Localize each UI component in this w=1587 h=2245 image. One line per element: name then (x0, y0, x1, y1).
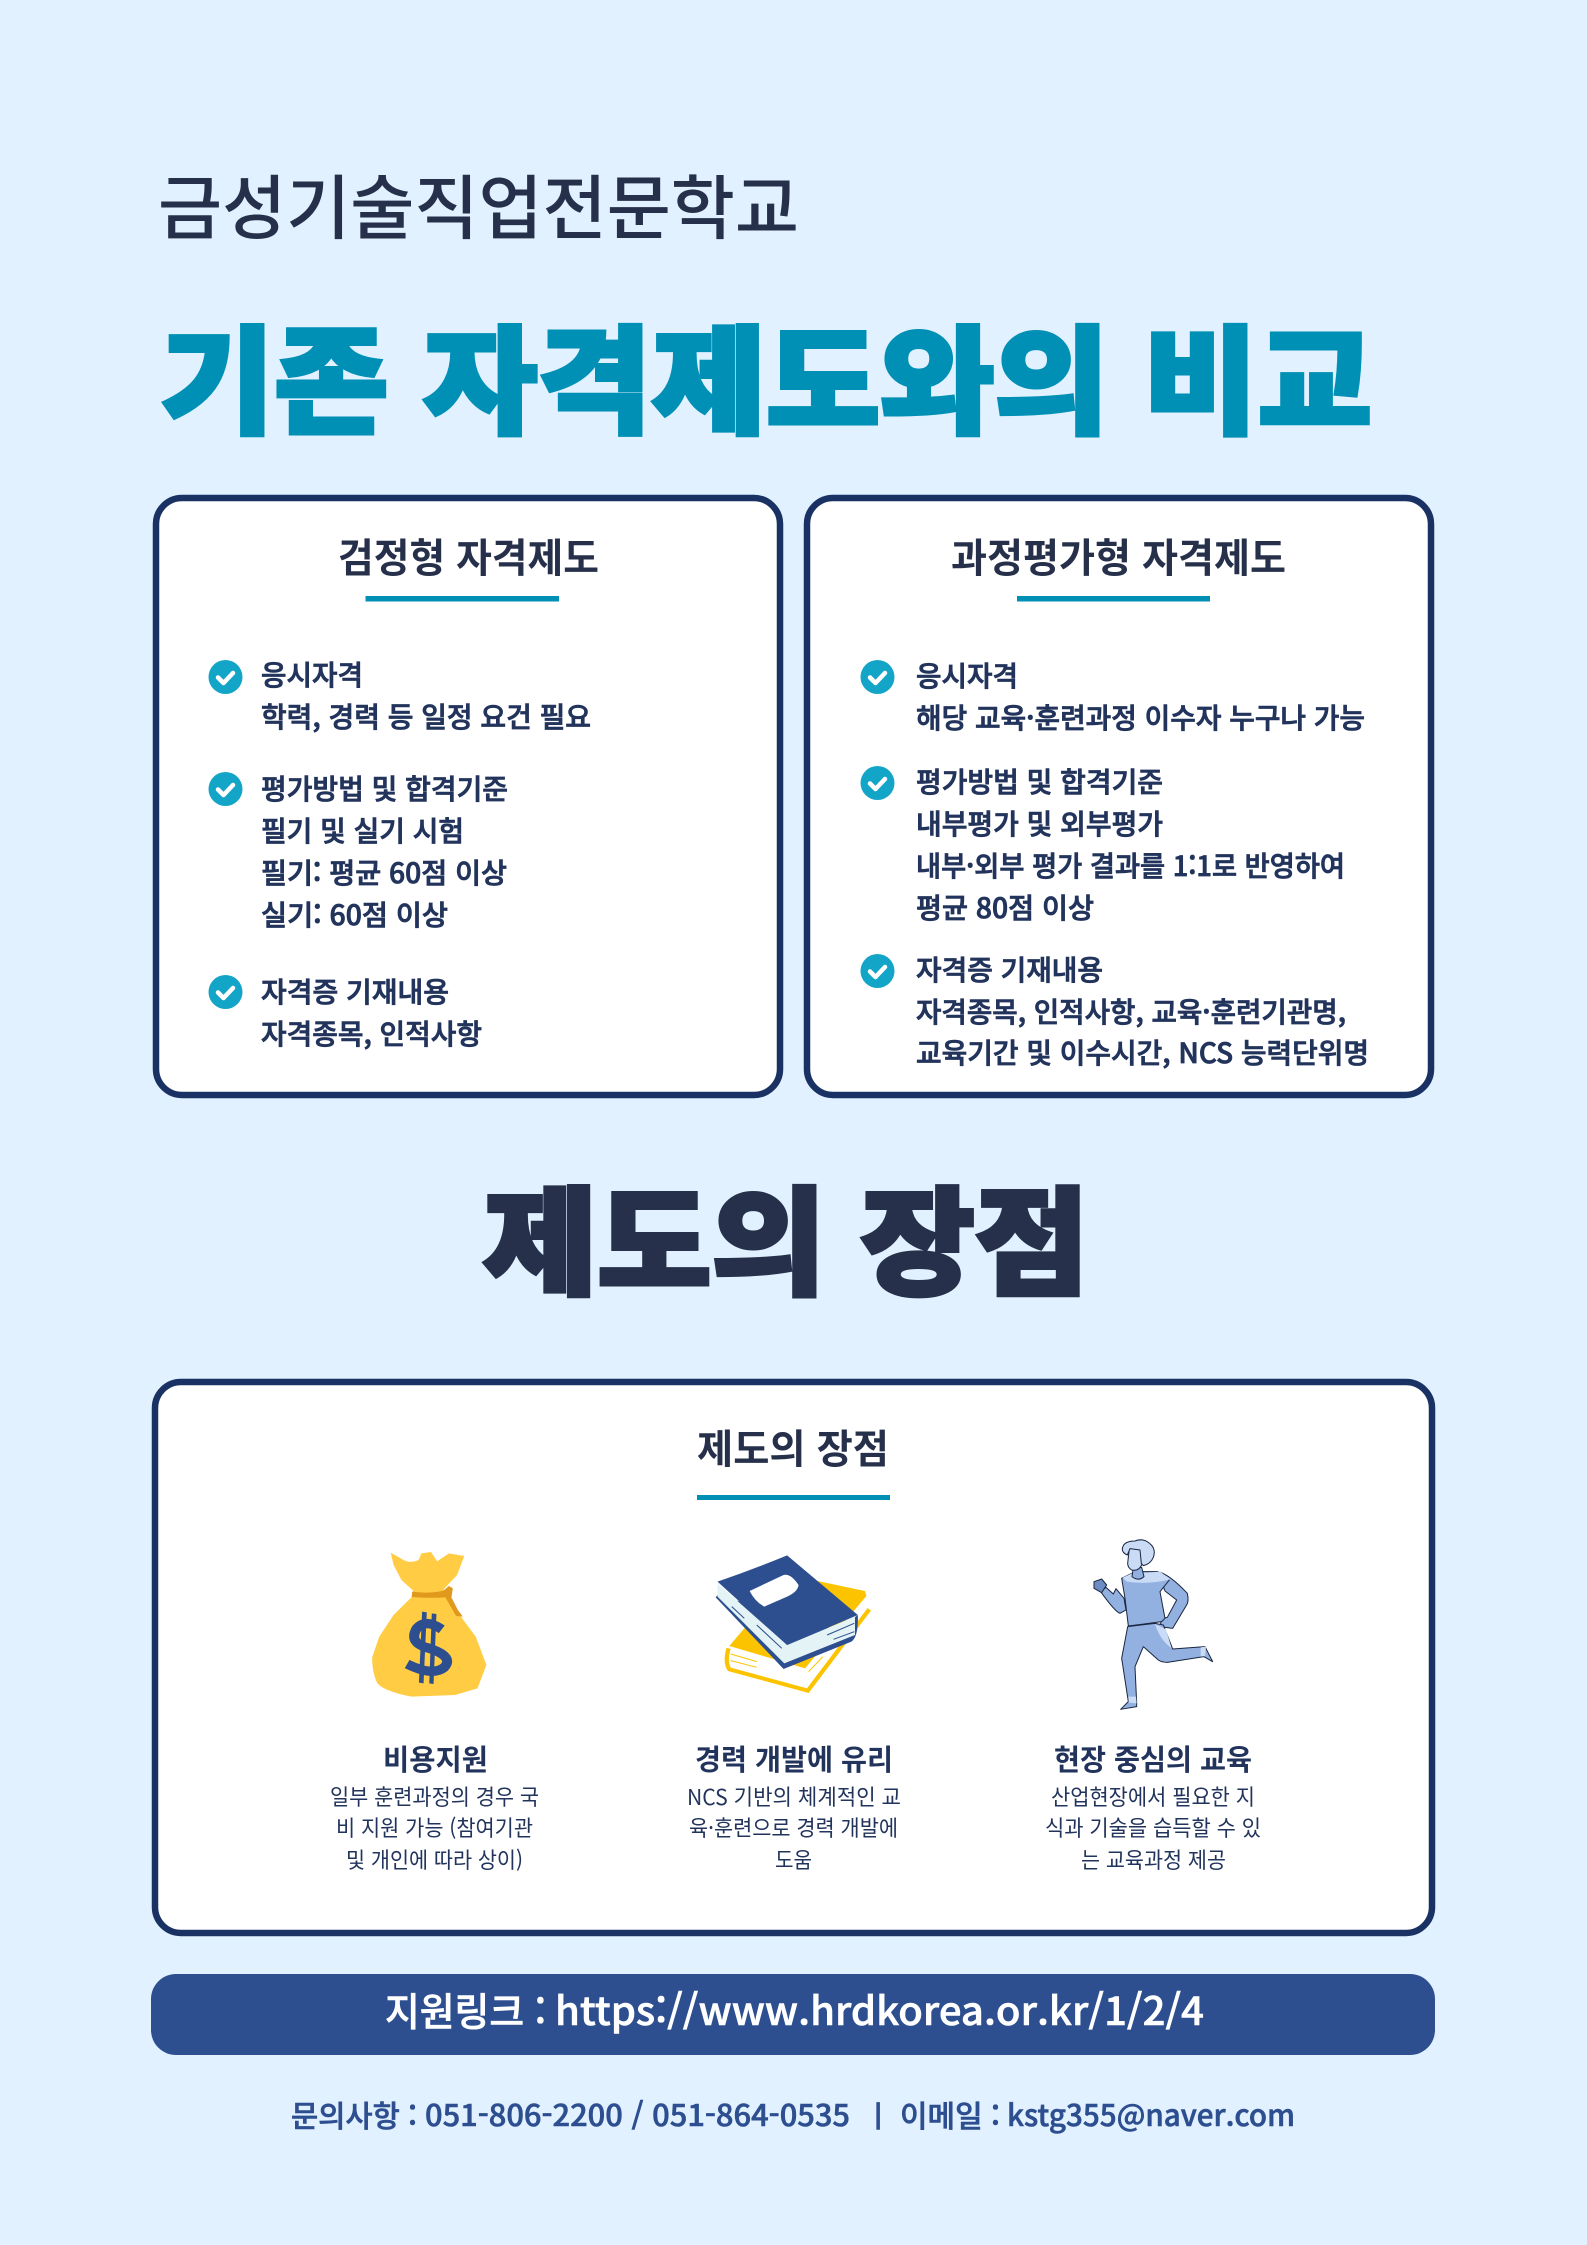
text: eligibility (916, 655, 1365, 737)
feature: field-focused education (1045, 1737, 1261, 1875)
icon: check 1 (860, 660, 894, 694)
text: evaluation method: 필기: 평균 60점 이상 (261, 852, 507, 892)
icon: stacked books (716, 1555, 869, 1691)
contact line: kstg355@naver.com (1007, 2091, 1295, 2135)
icon: running person (1094, 1540, 1213, 1709)
feature: cost support (330, 1737, 539, 1875)
panel: course-evaluation qualification system (807, 498, 1431, 1095)
text: eligibility: 응시자격 (916, 655, 1018, 695)
text: certificate contents (261, 971, 482, 1053)
support link bar: 지원링크 : (385, 1982, 546, 2038)
feature: field-focused education: 현장 중심의 교육 (1054, 1737, 1252, 1779)
text: evaluation method: 평가방법 및 합격기준 (261, 768, 508, 808)
icon: check 2 (860, 766, 894, 800)
text: certificate contents: 자격종목, 인적사항 (261, 1013, 482, 1053)
text: eligibility: 해당 교육·훈련과정 이수자 누구나 가능 (916, 697, 1365, 737)
icon: check 3 (860, 954, 894, 988)
text: evaluation method: 필기 및 실기 시험 (261, 810, 464, 850)
text: certificate contents: 교육기간 및 이수시간, NCS 능력단위명 (916, 1032, 1369, 1072)
text: evaluation method: 평균 80점 이상 (916, 887, 1094, 927)
text: eligibility: 응시자격 (261, 654, 363, 694)
contact line: 051-806-2200 / 051-864-0535 (425, 2091, 850, 2135)
feature: field-focused education: 산업현장에서 필요한 지 (1051, 1780, 1255, 1812)
support link bar (151, 1974, 1435, 2055)
text: evaluation method: 내부평가 및 외부평가 (916, 803, 1163, 843)
icon: money bag (372, 1552, 486, 1697)
contact line (291, 2091, 1295, 2136)
feature: cost support: 및 개인에 따라 상이) (346, 1843, 523, 1875)
panel heading: 검정형 자격제도 (338, 526, 599, 584)
feature: field-focused education: 식과 기술을 습득할 수 있 (1045, 1811, 1261, 1843)
contact line: ㅣ (865, 2092, 891, 2136)
section title: advantages: 제도의 장점 (483, 1149, 1089, 1319)
school name: 금성기술직업전문학교 (158, 153, 799, 254)
text: evaluation method (261, 768, 508, 934)
text: eligibility: 학력, 경력 등 일정 요건 필요 (261, 696, 591, 736)
feature: career development: NCS 기반의 체계적인 교 (687, 1780, 901, 1812)
feature: career development: 경력 개발에 유리 (695, 1737, 893, 1779)
feature: cost support: 비용지원 (383, 1737, 488, 1779)
text: certificate contents: 자격종목, 인적사항, 교육·훈련기관명, (916, 991, 1346, 1031)
feature: career development: 육·훈련으로 경력 개발에 (689, 1811, 898, 1843)
text: certificate contents: 자격증 기재내용 (261, 971, 449, 1011)
icon: check 1 (208, 660, 242, 694)
panel heading: 과정평가형 자격제도 (951, 526, 1286, 584)
feature: cost support: 비 지원 가능 (참여기관 (336, 1811, 533, 1843)
text: eligibility (261, 654, 591, 736)
contact line: 이메일 : (900, 2092, 1000, 2136)
main title: 기존 자격제도와의 비교 (160, 288, 1372, 458)
text: certificate contents (916, 949, 1369, 1072)
support link bar: https://www.hrdkorea.or.kr/1/2/4 (555, 1981, 1204, 2037)
text: certificate contents: 자격증 기재내용 (916, 949, 1103, 989)
icon: check 3 (208, 975, 242, 1009)
icon: check 2 (208, 772, 242, 806)
panel heading: 제도의 장점 (697, 1417, 889, 1475)
feature: field-focused education: 는 교육과정 제공 (1081, 1843, 1226, 1875)
feature: career development (687, 1737, 901, 1875)
feature: cost support: 일부 훈련과정의 경우 국 (330, 1780, 539, 1812)
text: evaluation method: 평가방법 및 합격기준 (916, 761, 1163, 801)
feature: career development: 도움 (775, 1843, 812, 1875)
panel: advantages (155, 1382, 1432, 1933)
text: evaluation method (916, 761, 1345, 927)
text: evaluation method: 실기: 60점 이상 (261, 894, 448, 934)
text: evaluation method: 내부·외부 평가 결과를 1:1로 반영하여 (916, 845, 1345, 885)
contact line: 문의사항 : (291, 2092, 417, 2136)
panel: exam-type qualification system (156, 498, 780, 1095)
